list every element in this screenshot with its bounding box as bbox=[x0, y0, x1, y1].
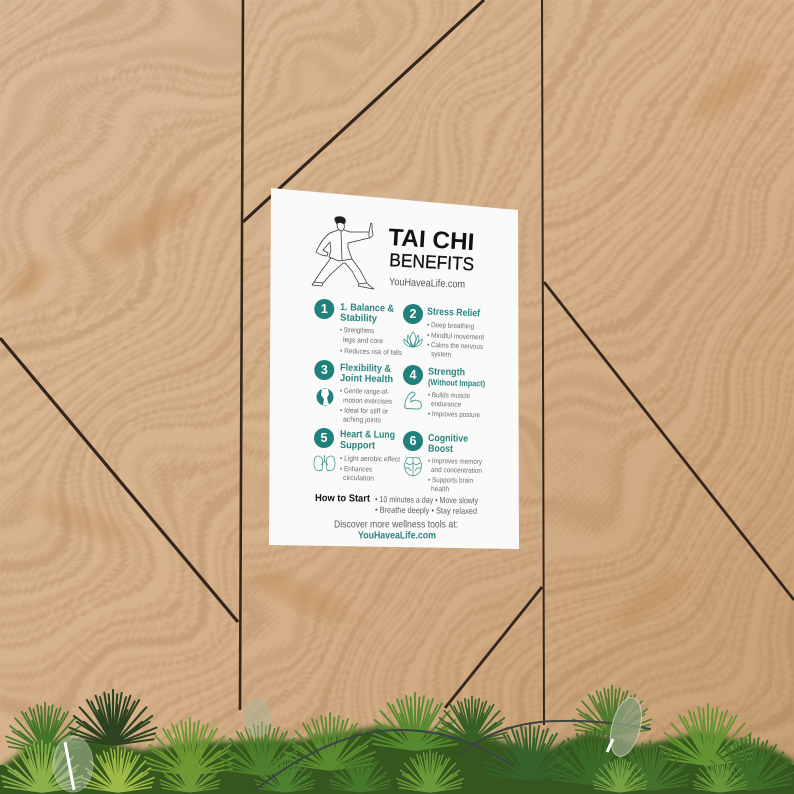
poster sheet bbox=[269, 188, 519, 549]
icon: flexed arm bbox=[405, 392, 421, 409]
item 1: balance and stability: legs and core bbox=[343, 335, 383, 345]
icon: brain bbox=[404, 457, 422, 476]
icon: lungs bbox=[314, 455, 335, 471]
heading: YouHaveaLife.com bbox=[389, 276, 465, 291]
item 6: cognitive boost bbox=[403, 431, 482, 493]
how to start: How to Start bbox=[315, 493, 371, 505]
item 2: stress relief: • Mindful movement bbox=[427, 331, 484, 341]
item 6: cognitive boost: Boost bbox=[428, 444, 454, 455]
item 4: strength: Strength bbox=[428, 367, 465, 378]
item 1: balance and stability: 1. Balance & bbox=[340, 302, 394, 315]
glass bulbs bbox=[53, 695, 647, 792]
item 4: strength: 4 bbox=[410, 368, 417, 382]
item 3: flexibility and joint health bbox=[314, 360, 393, 424]
item 4: strength: • Improves posture bbox=[428, 409, 480, 419]
item 2: stress relief: 2 bbox=[410, 307, 417, 321]
heading: BENEFITS bbox=[389, 249, 475, 274]
footer call to action: YouHaveaLife.com bbox=[358, 530, 436, 542]
item 3: flexibility and joint health: Flexibility & bbox=[340, 363, 391, 375]
footer call to action bbox=[334, 520, 458, 542]
item 3: flexibility and joint health: • Ideal for stiff or bbox=[340, 406, 389, 416]
how to start: • 10 minutes a day • Move slowly bbox=[375, 494, 479, 505]
item 5: heart and lung support: 5 bbox=[321, 431, 328, 445]
item 1: balance and stability: Stability bbox=[340, 313, 378, 325]
item 1: balance and stability bbox=[314, 299, 403, 357]
item 3: flexibility and joint health: aching joints bbox=[343, 415, 382, 424]
footer call to action: Discover more wellness tools at: bbox=[334, 520, 458, 530]
item 4: strength: endurance bbox=[431, 399, 461, 409]
item 2: stress relief bbox=[403, 304, 484, 359]
item 5: heart and lung support: circulation bbox=[343, 473, 374, 483]
item 3: flexibility and joint health: • Gentle range-of- bbox=[340, 386, 390, 396]
poster bbox=[269, 188, 519, 549]
item 2: stress relief: • Calms the nervous bbox=[427, 340, 484, 351]
item 6: cognitive boost: • Improves memory bbox=[428, 456, 482, 466]
item 1: balance and stability: • Reduces risk of falls bbox=[340, 346, 403, 357]
item 6: cognitive boost: • Supports brain bbox=[428, 475, 473, 485]
item 3: flexibility and joint health: Joint Health bbox=[340, 373, 393, 385]
item 6: cognitive boost: and concentration bbox=[431, 465, 482, 475]
item 4: strength bbox=[403, 365, 485, 419]
item 1: balance and stability: • Strengthens bbox=[340, 325, 375, 335]
item 6: cognitive boost: health bbox=[431, 484, 449, 493]
item 4: strength: • Builds muscle bbox=[428, 390, 470, 400]
item 1: balance and stability: 1 bbox=[321, 302, 328, 316]
illustration: tai chi figure bbox=[312, 217, 374, 289]
string of lights: wire bbox=[255, 721, 650, 790]
item 4: strength: (Without Impact) bbox=[428, 377, 485, 388]
item 2: stress relief: • Deep breathing bbox=[427, 320, 474, 331]
item 5: heart and lung support: • Enhances bbox=[340, 464, 372, 474]
item 5: heart and lung support: • Light aerobic effect bbox=[340, 454, 400, 464]
heading bbox=[388, 224, 475, 291]
how to start: • Breathe deeply • Stay relaxed bbox=[375, 505, 477, 516]
item 5: heart and lung support: Heart & Lung bbox=[340, 429, 395, 441]
heading: TAI CHI bbox=[388, 224, 475, 256]
item 6: cognitive boost: Cognitive bbox=[428, 433, 469, 445]
how to start bbox=[315, 493, 479, 516]
item 5: heart and lung support: Support bbox=[340, 440, 376, 452]
icon: lotus bbox=[404, 332, 422, 347]
item 3: flexibility and joint health: motion exercises bbox=[343, 396, 393, 406]
item 5: heart and lung support bbox=[314, 428, 400, 483]
item 6: cognitive boost: 6 bbox=[410, 434, 417, 448]
item 2: stress relief: system bbox=[431, 349, 451, 359]
item 2: stress relief: Stress Relief bbox=[427, 307, 481, 319]
icon: knee joint bbox=[316, 388, 334, 406]
item 3: flexibility and joint health: 3 bbox=[321, 363, 328, 377]
foliage: pine garland bbox=[0, 686, 794, 794]
